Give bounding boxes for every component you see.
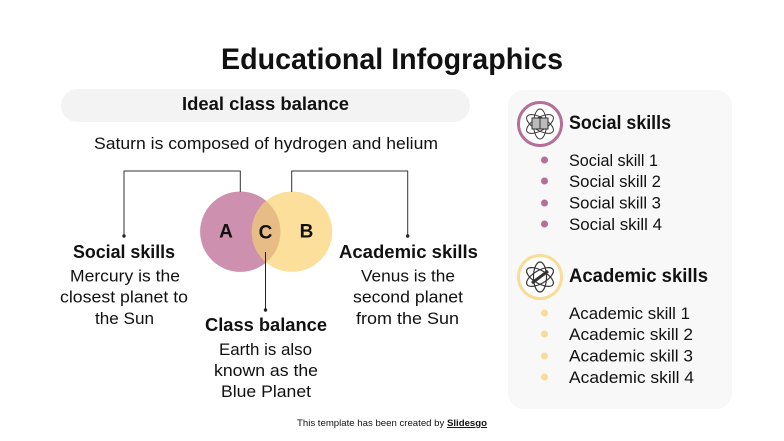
- text block: social skills: closest planet to: [60, 288, 188, 306]
- list: academic skills: Academic skill 3: [569, 348, 693, 366]
- list: academic skills: [541, 305, 694, 387]
- list: academic skills: Academic skill 2: [569, 326, 693, 344]
- text block: academic skills: second planet: [353, 288, 463, 306]
- circle B: [252, 192, 332, 272]
- connector: academic skills: [292, 171, 409, 238]
- heading: ideal class balance: Ideal class balance: [182, 94, 349, 114]
- chart: venn diagram: [200, 192, 332, 272]
- text block: social skills: Mercury is the: [70, 268, 180, 286]
- text: subtitle: Saturn is composed of hydrogen and helium: [94, 134, 438, 153]
- text block: class balance: known as the: [214, 362, 318, 380]
- panel: skills list: [508, 90, 732, 409]
- icon: social skills atom and book: [518, 102, 562, 146]
- overlap C: [252, 201, 280, 262]
- list: academic skills: Academic skill 1: [569, 305, 690, 323]
- connector: social skills: [122, 171, 240, 238]
- circle A: [200, 192, 280, 272]
- footer credit: This template has been created by Slidesgo: [297, 418, 487, 429]
- list: academic skills: Academic skill 4: [569, 369, 694, 387]
- label C: C: [259, 222, 273, 244]
- text block: academic skills: Venus is the: [361, 268, 455, 286]
- list: social skills: Social skill 1: [569, 152, 658, 170]
- text block: academic skills: Academic skills: [339, 242, 478, 262]
- text block: class balance: Class balance: [205, 315, 327, 335]
- title: Educational Infographics: [221, 43, 563, 76]
- text block: social skills: Social skills: [73, 242, 175, 262]
- heading: academic skills: Academic skills: [569, 266, 708, 287]
- text block: social skills: [60, 242, 188, 328]
- text block: class balance: Earth is also: [219, 341, 312, 359]
- text block: class balance: [205, 315, 327, 401]
- text block: social skills: the Sun: [95, 310, 154, 328]
- connector: class balance: [264, 252, 267, 312]
- list: social skills: Social skill 3: [569, 194, 661, 212]
- text block: class balance: Blue Planet: [221, 383, 311, 401]
- label A: A: [219, 222, 233, 242]
- panel: ideal class balance: [61, 89, 470, 122]
- list: social skills: [541, 152, 662, 234]
- label B: B: [300, 222, 313, 242]
- list: social skills: Social skill 2: [569, 173, 661, 191]
- text block: academic skills: from the Sun: [356, 310, 459, 328]
- heading: social skills: Social skills: [569, 113, 671, 134]
- text block: academic skills: [339, 242, 478, 328]
- icon: academic skills atom: [518, 256, 562, 298]
- list: social skills: Social skill 4: [569, 216, 662, 234]
